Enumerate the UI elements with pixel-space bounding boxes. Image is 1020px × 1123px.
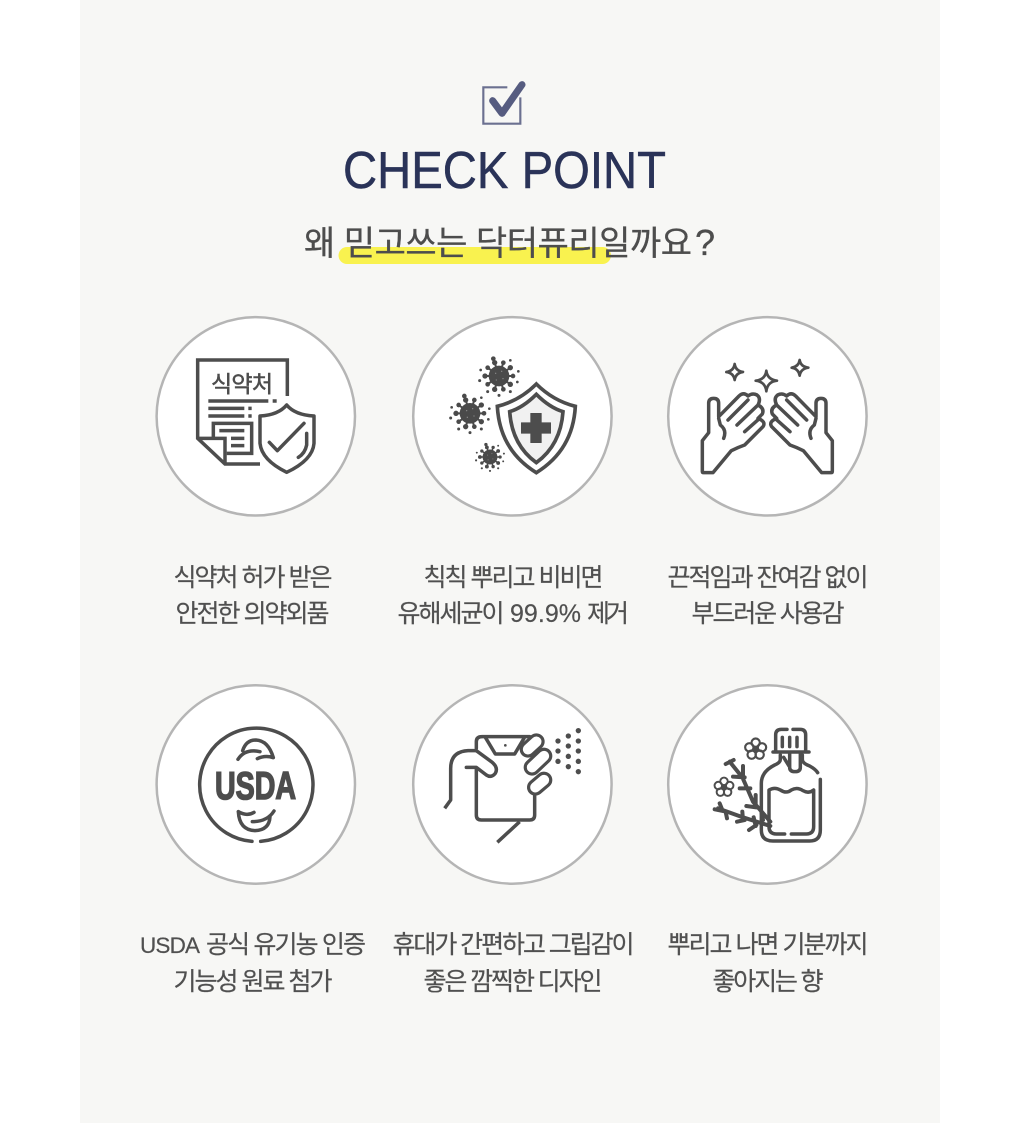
- caption: 제거: [587, 600, 629, 628]
- caption: 안전한 의약외품: [176, 600, 330, 628]
- circle background: [413, 317, 612, 516]
- title: CHECK POINT: [343, 142, 666, 200]
- icon: tea tree oil bottle: [715, 729, 820, 841]
- caption: 뿌리고 나면 기분까지: [668, 931, 868, 959]
- caption: 칙칙 뿌리고 비비면: [424, 564, 604, 592]
- panel: portable spray: [392, 685, 634, 996]
- bottle: [761, 729, 820, 841]
- caption: 99.9%: [510, 600, 581, 628]
- panel: food and drug approval: [157, 317, 355, 628]
- branches: [715, 760, 770, 830]
- virus middle: [449, 394, 491, 434]
- subtitle text: ?: [695, 222, 715, 263]
- caption: 기능성 원료 첨가: [174, 968, 332, 996]
- flower small: [715, 778, 733, 796]
- icon: viruses and shield: [449, 356, 575, 473]
- virus bottom: [475, 443, 505, 472]
- fingers: [528, 742, 544, 787]
- shield: [497, 384, 575, 473]
- icon: approved document with shield: [198, 360, 314, 472]
- panel: non-sticky hands: [668, 317, 868, 628]
- caption: 끈적임과 잔여감 없이: [668, 564, 868, 592]
- caption: 공식 유기농 인증: [206, 931, 366, 959]
- caption: 좋은 깜찍한 디자인: [424, 968, 602, 996]
- caption: 좋아지는 향: [712, 968, 824, 996]
- circle background: [157, 317, 355, 516]
- yellow highlight: [338, 247, 611, 264]
- subtitle text: 왜 믿고쓰는 닥터퓨리일까요: [304, 225, 692, 263]
- caption: 부드러운 사용감: [692, 600, 844, 628]
- circle background: [413, 685, 612, 884]
- icon: hands and sparkles: [702, 360, 832, 473]
- panel: USDA organic: [140, 685, 366, 996]
- icon: hand holding spray: [445, 728, 581, 842]
- seal text: USDA: [215, 765, 296, 808]
- circle background: [157, 685, 355, 884]
- virus top: [478, 356, 520, 397]
- panel: pleasant scent: [668, 685, 868, 996]
- panel: antibacterial spray: [398, 317, 629, 628]
- flower large: [745, 738, 766, 759]
- circle background: [668, 685, 867, 884]
- icon label: 식약처: [211, 371, 273, 397]
- caption: 유해세균이: [398, 600, 504, 628]
- subtitle with highlight: [304, 222, 715, 264]
- caption: 휴대가 간편하고 그립감이: [392, 931, 634, 959]
- spray dots: [504, 728, 581, 774]
- icon: checkbox with tick: [483, 85, 522, 124]
- circle background: [668, 317, 867, 516]
- icon: USDA seal: [200, 728, 313, 841]
- caption: USDA: [140, 933, 200, 958]
- caption: 식약처 허가 받은: [174, 564, 332, 592]
